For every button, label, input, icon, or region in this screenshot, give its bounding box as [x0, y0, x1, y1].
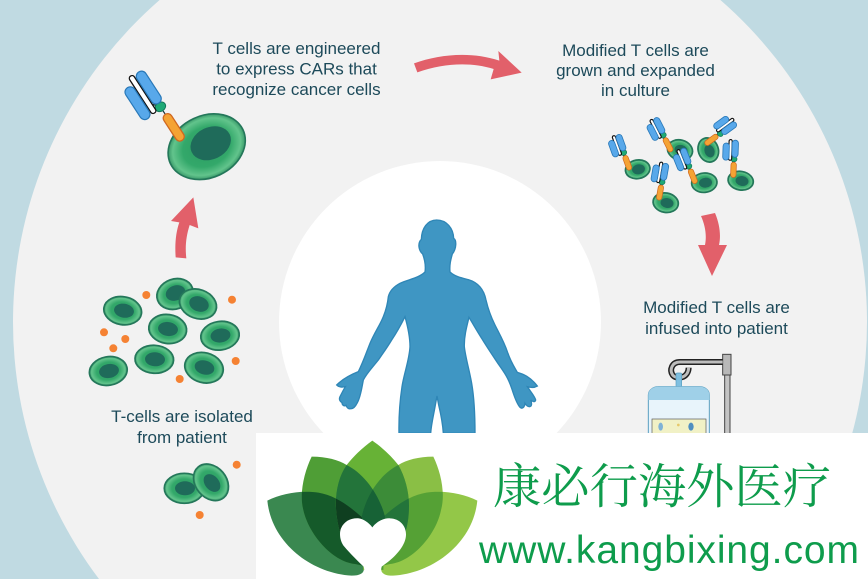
logo: lotus heart: [267, 441, 477, 579]
heading: engineered T cells: recognize cancer cells: [212, 80, 381, 99]
heading: T-cells isolated: [111, 407, 253, 447]
heading: infused into patient: [643, 298, 790, 338]
logo panel: [256, 433, 868, 579]
brand name: 康必行海外医疗: [493, 461, 831, 514]
inner white circle: [279, 161, 601, 483]
heading: T-cells isolated: from patient: [137, 428, 227, 447]
heading: grown and expanded: Modified T cells are: [562, 41, 709, 60]
CAR T cell illustration: [119, 68, 256, 192]
expanded CAR T cells: [606, 113, 755, 214]
arrow: isolated to engineered: [171, 197, 198, 258]
heading: engineered T cells: to express CARs that: [216, 60, 377, 78]
website url: www.kangbixing.com: [478, 529, 859, 572]
human body silhouette: [337, 220, 537, 433]
arrow: engineered to culture: [414, 51, 522, 79]
T cell pair: [164, 457, 241, 519]
heading: infused into patient: Modified T cells are: [643, 298, 790, 317]
heading: grown and expanded: in culture: [601, 81, 670, 100]
heading: engineered T cells: T cells are engineered: [213, 39, 380, 58]
isolated T cells cluster: [87, 274, 241, 388]
heading: engineered T cells: [212, 39, 381, 99]
heading: grown and expanded: grown and expanded: [556, 61, 715, 80]
heading: T-cells isolated: T-cells are isolated: [111, 407, 253, 426]
heading: infused into patient: infused into patient: [645, 319, 788, 338]
heading: grown and expanded: [556, 41, 715, 100]
IV bag and pole: [648, 354, 731, 434]
arrow: culture to infusion: [698, 213, 727, 276]
